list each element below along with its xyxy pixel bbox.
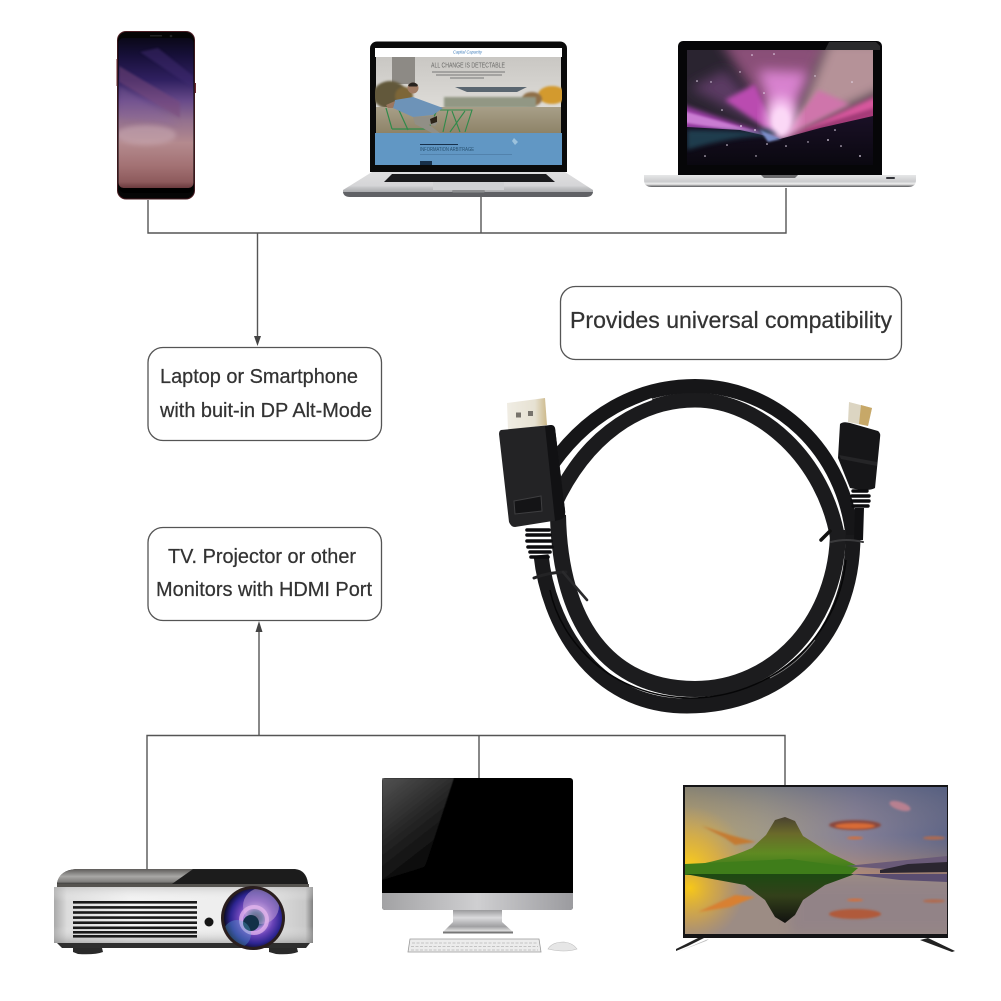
HDMI plug	[838, 402, 880, 490]
laptop screen: website: INFORMATION ARBITRAGE	[420, 147, 474, 153]
laptop screen: website: Capital Capacity	[453, 50, 483, 54]
projector vent	[73, 901, 197, 938]
DP strain relief	[527, 530, 552, 557]
callout: universal compatibility	[560, 286, 902, 360]
HDMI strain relief	[852, 491, 869, 506]
callout: laptop or smartphone	[148, 348, 382, 440]
gap highlights	[561, 399, 815, 678]
icon: laptop with galaxy wallpaper	[644, 40, 916, 187]
icon: laptop with website	[343, 42, 593, 197]
icon: smartphone	[116, 31, 196, 200]
callout: laptop or smartphone: with buit-in DP Alt-Mode	[159, 399, 372, 422]
connector lines: bottom devices	[147, 621, 785, 869]
TV screen: mountain landscape	[685, 787, 960, 935]
callout: universal compatibility: Provides universal compatibility	[570, 307, 892, 333]
mouse	[548, 942, 577, 951]
connector lines: top devices	[148, 188, 786, 346]
callout: TV projector monitors: Monitors with HDMI Port	[156, 578, 372, 601]
laptop screen: website: ALL CHANGE IS DETECTABLE	[431, 60, 505, 70]
callout: laptop or smartphone: Laptop or Smartphone	[160, 365, 358, 388]
keyboard	[408, 939, 541, 952]
callout: TV projector monitors	[148, 528, 382, 620]
cable loops	[541, 386, 853, 706]
DisplayPort plug	[499, 398, 565, 527]
icon: projector	[54, 869, 313, 954]
callout: TV projector monitors: TV. Projector or other	[168, 545, 356, 568]
cable: DisplayPort to HDMI	[499, 386, 880, 706]
icon: desktop monitor	[382, 778, 577, 952]
projector lens	[221, 886, 285, 950]
cable ties	[534, 531, 863, 600]
projector feet	[73, 948, 298, 954]
galaxy nebula	[687, 50, 873, 139]
laptop screen: website	[373, 48, 566, 165]
icon: television	[676, 785, 960, 952]
